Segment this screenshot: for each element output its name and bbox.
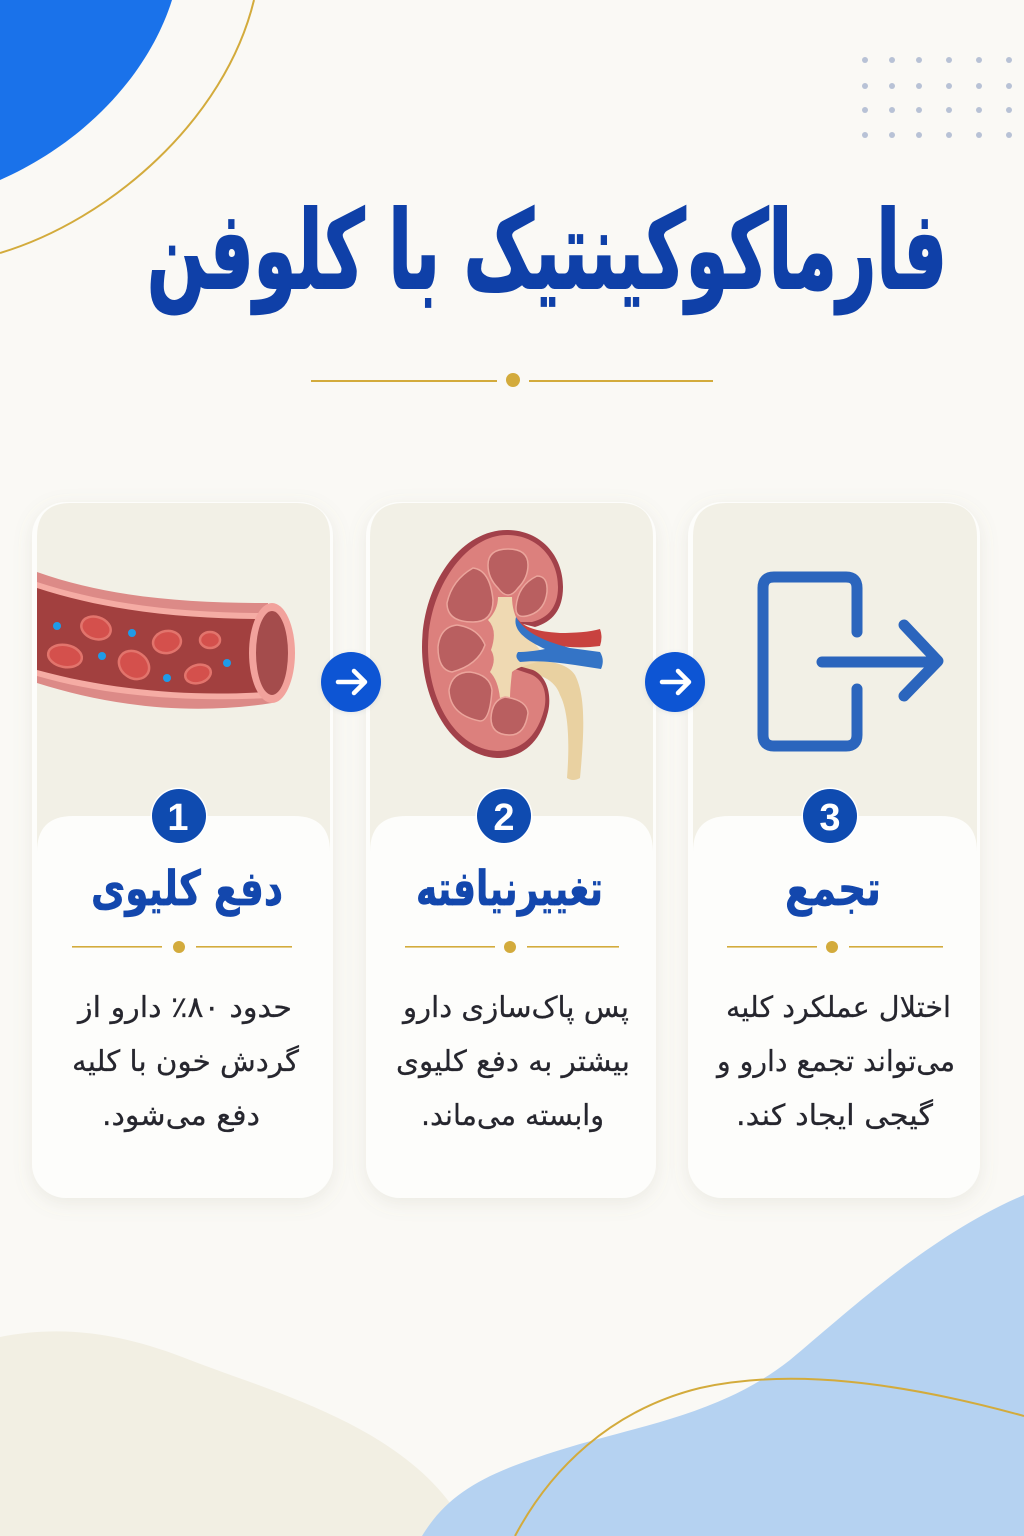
card 3 heading: تجمع <box>785 861 881 917</box>
icon: exit arrow <box>763 577 938 746</box>
card 1 divider <box>72 941 292 953</box>
background: gold curve bottom-right <box>515 1379 1024 1536</box>
panel: step 3 accumulation <box>688 502 980 1198</box>
icon: blood vessel with cells <box>37 572 295 709</box>
card 1 body text <box>72 990 299 1132</box>
kidney outer rim <box>422 530 563 758</box>
card 2 body text: پس پاک‌سازی دارو <box>401 990 629 1025</box>
dot grid top-right <box>862 57 1012 138</box>
step number 3 <box>802 788 858 844</box>
ureter <box>515 661 583 780</box>
card 2 body text: بیشتر به دفع کلیوی <box>396 1044 630 1078</box>
card 3 image area <box>693 503 977 860</box>
kidney cortex <box>428 535 558 751</box>
step number 3: 3 <box>819 797 841 839</box>
card 1 text panel <box>37 816 330 1150</box>
card 1 heading: دفع کلیوی <box>91 861 283 917</box>
background: blue wave bottom-right <box>422 1195 1024 1536</box>
card 1 image area <box>37 503 330 860</box>
card 3 body text: گیجی ایجاد کند. <box>736 1098 933 1132</box>
renal vein <box>515 617 603 669</box>
renal artery <box>517 618 602 647</box>
card 3 body text: می‌تواند تجمع دارو و <box>715 1044 955 1078</box>
background: gold arc top-left <box>0 0 254 253</box>
card 3 body text: اختلال عملکرد کلیه <box>726 990 951 1024</box>
card 3 divider <box>727 941 943 953</box>
card 2 image area <box>370 503 653 860</box>
icon: kidney cross-section <box>422 530 603 780</box>
card 2 base <box>366 502 656 1198</box>
title divider <box>311 373 713 387</box>
card 1 body text: دفع می‌شود. <box>102 1098 260 1132</box>
card 1 body text: حدود ۸۰٪ دارو از <box>76 990 292 1024</box>
renal pyramids <box>438 549 547 735</box>
card 2 body text <box>396 990 630 1132</box>
card 3 base <box>688 502 980 1198</box>
card 2 body text: وابسته می‌ماند. <box>421 1098 604 1132</box>
panel: step 2 unchanged <box>366 502 656 1198</box>
background: blue corner shape top-left <box>0 0 172 180</box>
card 3 text panel <box>693 816 977 1150</box>
arrow: step 2 to step 3 <box>645 652 705 712</box>
arrow: step 1 to step 2 <box>321 652 381 712</box>
card 2 divider <box>405 941 619 953</box>
renal pelvis <box>488 597 548 698</box>
card 1 body text: گردش خون با کلیه <box>72 1044 299 1078</box>
card 3 body text <box>715 990 955 1132</box>
step number 2 <box>476 788 532 844</box>
card 1 base <box>32 502 333 1198</box>
step number 2: 2 <box>493 797 515 839</box>
card 2 text panel <box>370 816 653 1150</box>
background: beige wave bottom-left <box>0 1331 470 1536</box>
step number 1: 1 <box>167 797 189 839</box>
card 2 heading: تغییرنیافته <box>416 861 603 917</box>
step number 1 <box>150 788 208 844</box>
panel: step 1 renal excretion <box>32 502 333 1198</box>
